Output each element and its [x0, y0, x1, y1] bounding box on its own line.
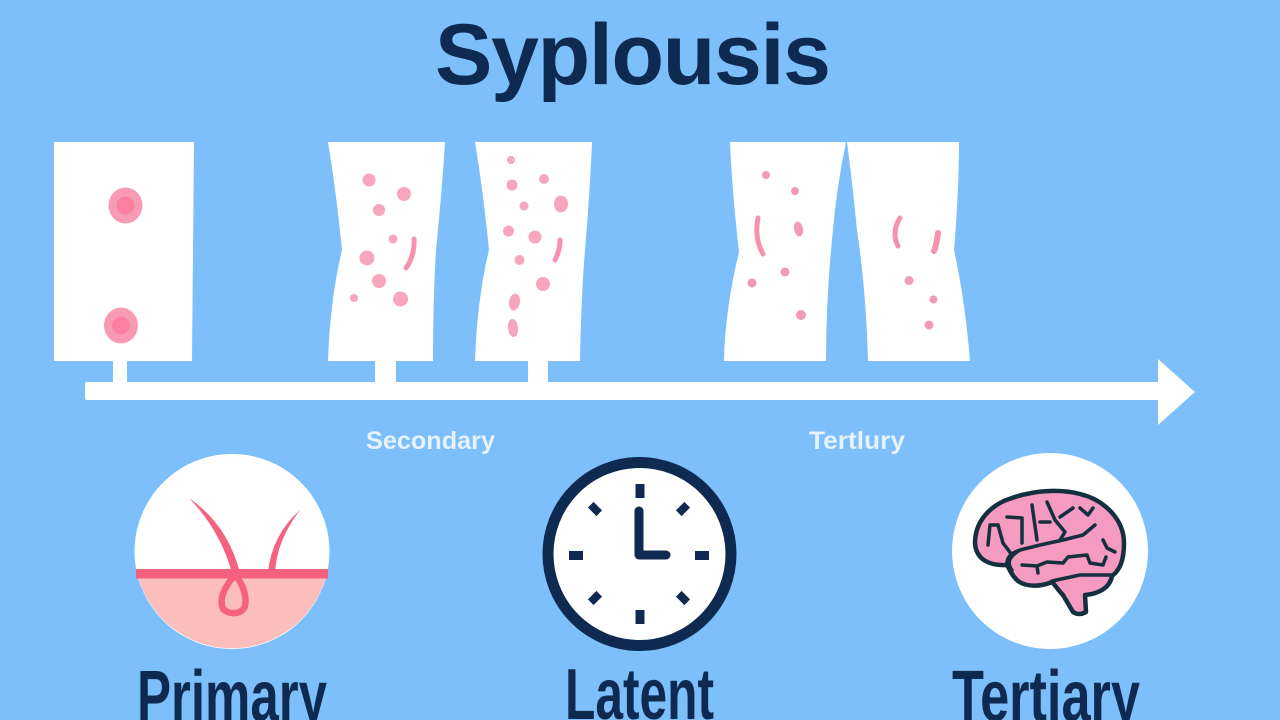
timeline arrow	[85, 359, 1195, 425]
title: Syplousis	[435, 7, 831, 103]
sore upper	[108, 188, 142, 224]
icon: skin and hair follicle	[134, 454, 330, 649]
panel: tertiary skin left	[724, 142, 846, 361]
panel: tertiary skin right	[847, 142, 970, 361]
label: Tertlury: Tertlury	[809, 427, 905, 455]
icon: brain	[952, 453, 1148, 649]
sore lower	[104, 308, 138, 344]
panel: secondary rash skin left	[328, 142, 445, 361]
panel: secondary rash skin right	[475, 142, 592, 361]
icon: clock	[548, 462, 731, 646]
label: Secondary: Secondary	[366, 427, 495, 455]
panel: primary skin with two sores	[54, 142, 194, 361]
